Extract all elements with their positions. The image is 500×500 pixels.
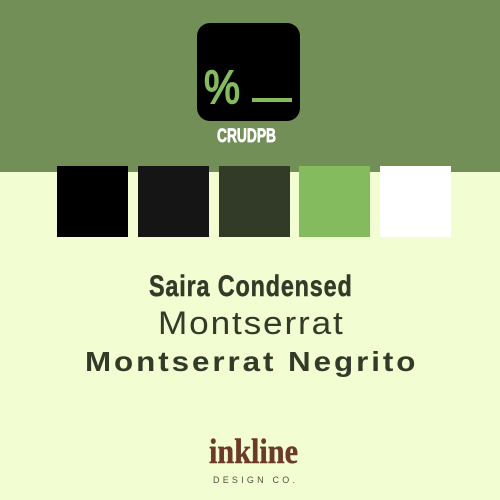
brand name: CRUDPB — [217, 126, 276, 147]
icon: terminal prompt — [197, 23, 300, 121]
icon: terminal prompt: % — [204, 60, 240, 113]
logo: inkline design co.: inkline — [209, 432, 298, 471]
logo: inkline design co. — [209, 432, 298, 485]
font name: Montserrat: Montserrat — [158, 306, 343, 342]
header band — [0, 0, 500, 172]
logo: inkline design co.: DESIGN CO. — [213, 475, 295, 485]
font name: Montserrat Negrito: Montserrat Negrito — [85, 347, 415, 378]
font name: Saira Condensed: Saira Condensed — [149, 269, 352, 303]
colour palette swatches — [57, 166, 451, 237]
